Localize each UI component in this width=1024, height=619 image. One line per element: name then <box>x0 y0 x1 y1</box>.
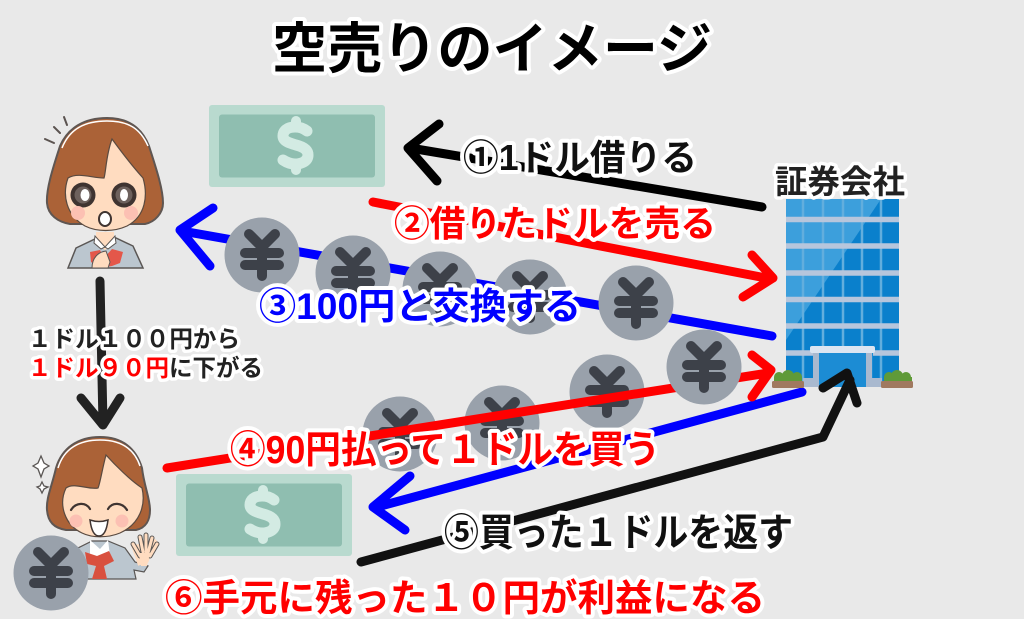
window columns <box>803 199 881 387</box>
arrow: price fall <box>81 281 120 425</box>
arrow 3: exchange for 100 yen <box>180 208 772 336</box>
emphasis marks <box>45 117 67 143</box>
face <box>65 139 145 230</box>
coin: profit <box>14 536 88 610</box>
label: step 4: ④90円払って１ドルを買う <box>230 429 660 472</box>
tie and hand <box>90 249 123 268</box>
planter left <box>772 370 804 388</box>
arrow 4: pay 90 yen <box>167 355 771 468</box>
arrow 2: sell borrowed dollar <box>373 202 773 297</box>
raised hand <box>133 535 157 566</box>
coin: bottom row right <box>666 330 742 404</box>
title: 空売りのイメージ <box>272 18 712 80</box>
mouth <box>99 212 111 226</box>
planter right <box>881 370 913 388</box>
coins: top row <box>224 218 674 340</box>
glass reflection <box>786 199 881 340</box>
body <box>68 238 143 268</box>
icon: securities company building <box>772 199 913 388</box>
sparkles <box>33 456 49 493</box>
entrance <box>813 350 873 387</box>
hair <box>47 437 150 530</box>
icon: dollar bill top <box>209 105 385 187</box>
arrow: blue return of dollar <box>373 392 802 530</box>
label: step 2: ②借りたドルを売る <box>394 203 716 244</box>
label: step 1: ①1ドル借りる <box>463 137 697 178</box>
icon: surprised girl <box>45 117 163 268</box>
label: price change 2: １ドル９０円に下がる <box>28 354 263 381</box>
label: step 6: ⑥手元に残った１０円が利益になる <box>165 577 765 619</box>
face <box>63 455 143 537</box>
label: step 3: ③100円と交換する <box>259 286 581 327</box>
eyes <box>70 182 96 208</box>
smile <box>90 520 108 536</box>
label: step 5: ⑤買った１ドルを返す <box>444 512 793 555</box>
cheeks <box>71 206 85 220</box>
body <box>62 541 148 579</box>
label: company: 証券会社 <box>775 164 905 200</box>
arrow 5: return dollar <box>361 373 857 562</box>
closed eyes <box>71 504 127 510</box>
icon: dollar bill bottom <box>176 474 352 556</box>
bow tie <box>85 551 114 579</box>
cheeks <box>70 514 82 528</box>
hair <box>47 118 163 224</box>
icon: happy girl <box>33 437 157 579</box>
floor bands <box>786 220 899 353</box>
coins: bottom row <box>362 354 644 472</box>
arrow 1: borrow one dollar <box>408 124 762 207</box>
label: price change: １ドル１００円から <box>28 326 240 352</box>
